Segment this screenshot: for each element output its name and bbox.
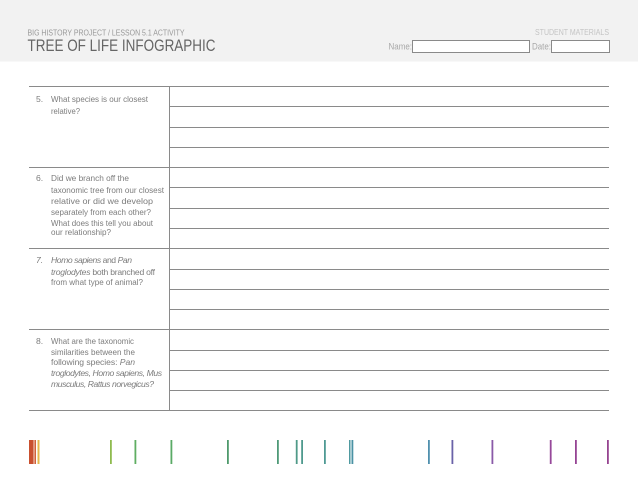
date field — [532, 40, 610, 52]
question 5: relative? — [51, 106, 80, 116]
question 5 — [36, 94, 149, 116]
student materials label: STUDENT MATERIALS — [535, 27, 609, 37]
question table — [29, 86, 609, 411]
question 6 — [36, 173, 165, 237]
date field: Date: — [532, 42, 551, 52]
lesson label: BIG HISTORY PROJECT / LESSON 5.1 ACTIVITY — [28, 28, 185, 38]
name field — [388, 40, 530, 52]
question 6: Did we branch off the — [51, 173, 129, 183]
question 7: troglodytes both branched off — [51, 267, 156, 277]
colour timeline bars — [29, 440, 609, 464]
question 8: similarities between the — [51, 347, 135, 357]
question 6: separately from each other? — [51, 207, 151, 217]
question 6: 6. — [36, 173, 43, 183]
question 7: from what type of animal? — [51, 277, 143, 287]
name field: Name: — [388, 42, 412, 52]
header band — [0, 0, 638, 62]
question 6: What does this tell you about — [51, 218, 154, 228]
question 7 — [36, 255, 156, 287]
question 8: What are the taxonomic — [51, 336, 135, 346]
question 8 — [36, 336, 163, 389]
question 5: What species is our closest — [51, 94, 149, 104]
question 6: relative or did we develop — [51, 196, 153, 206]
title: TREE OF LIFE INFOGRAPHIC — [28, 37, 216, 55]
question 6: our relationship? — [51, 227, 111, 237]
question 7: Homo sapiens and Pan — [51, 255, 132, 265]
question 5: 5. — [36, 94, 43, 104]
question 7: 7. — [36, 255, 43, 265]
question 8: musculus, Rattus norvegicus? — [51, 379, 154, 389]
question 6: taxonomic tree from our closest — [51, 185, 165, 195]
question 8: 8. — [36, 336, 43, 346]
question 8: following species: Pan — [51, 357, 135, 367]
question 8: troglodytes, Homo sapiens, Mus — [51, 368, 163, 378]
